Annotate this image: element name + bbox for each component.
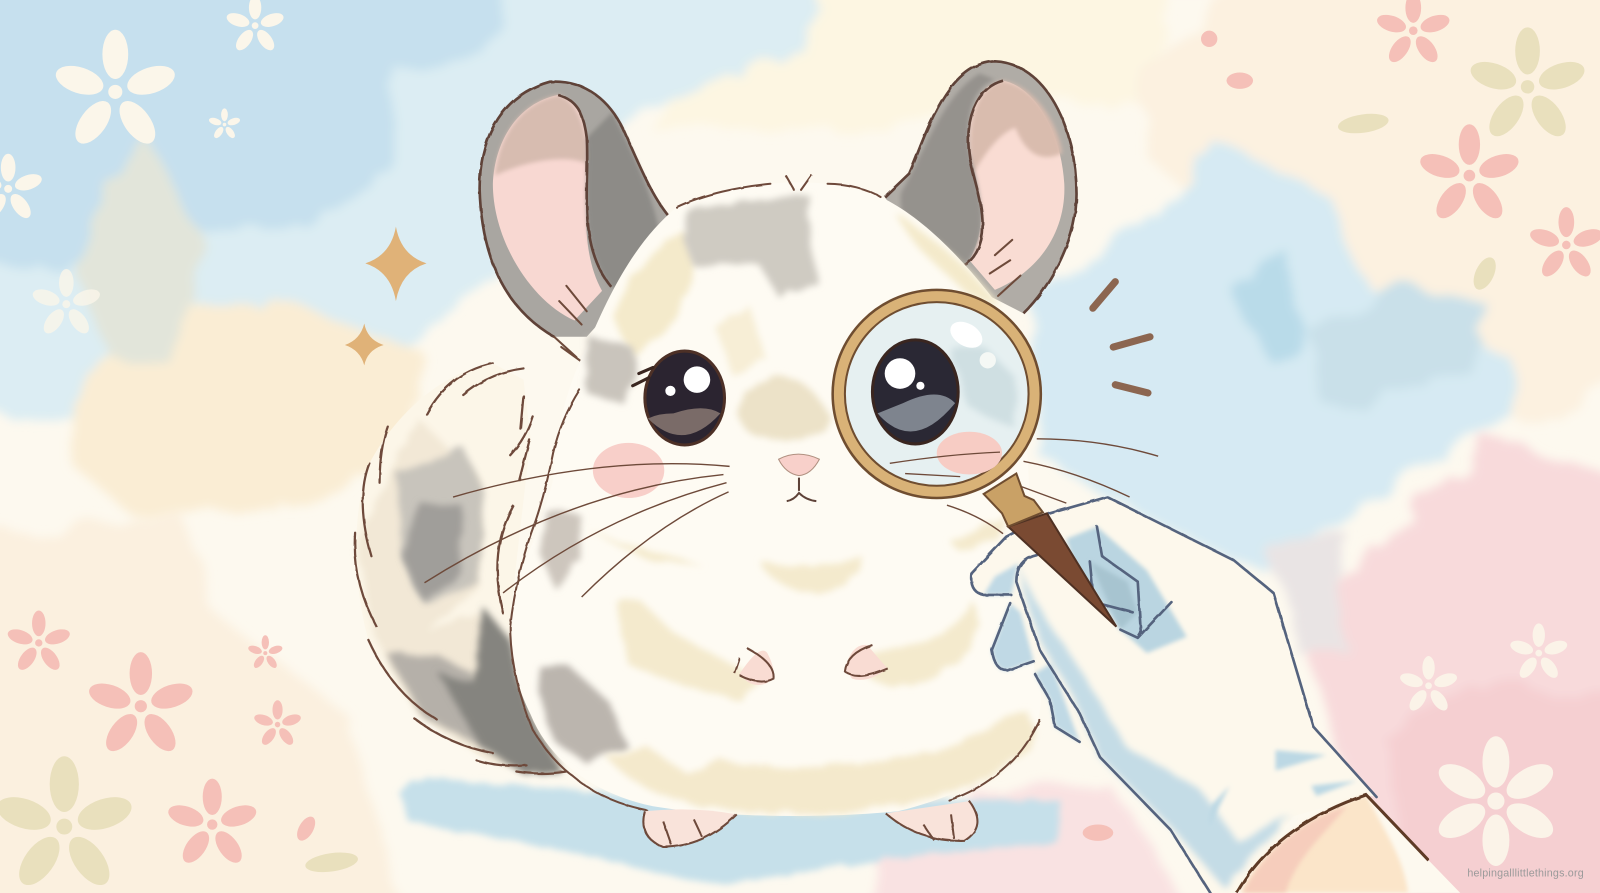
- tail: [355, 363, 566, 774]
- gloved hand: [971, 497, 1377, 893]
- left eye: [633, 351, 724, 445]
- ear: left: [480, 82, 672, 365]
- sparkles: [345, 227, 427, 365]
- watermark: helpingalllittlethings.org: [1467, 868, 1584, 880]
- magnifying glass: [833, 290, 1116, 627]
- whiskers: [424, 439, 1158, 597]
- ground shadow: [398, 778, 1061, 886]
- ear: right: [885, 61, 1077, 313]
- motion marks: [1093, 282, 1150, 393]
- paws: [643, 645, 977, 847]
- body: [510, 176, 1041, 816]
- forearm: [1237, 795, 1460, 893]
- cheek and face: [593, 443, 819, 501]
